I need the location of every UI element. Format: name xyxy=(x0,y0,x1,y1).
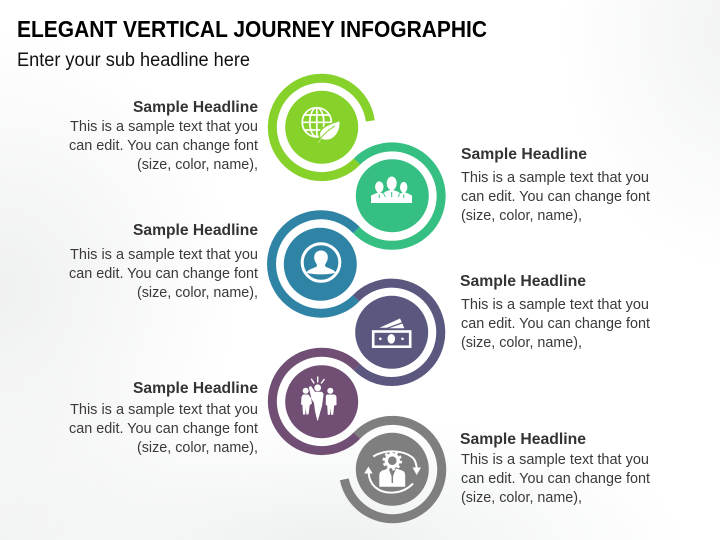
icon: banknotes xyxy=(373,318,410,347)
text block: right 2: Sample Headline xyxy=(460,273,586,290)
text block: left 3: can edit. You can change font xyxy=(69,421,258,437)
text block: left 2 xyxy=(69,222,258,301)
text block: right 2: can edit. You can change font xyxy=(461,316,650,332)
text block: left 1: (size, color, name), xyxy=(137,157,258,173)
text block: left 3: (size, color, name), xyxy=(137,440,258,456)
text block: right 3: can edit. You can change font xyxy=(461,471,650,487)
text block: right 2: This is a sample text that you xyxy=(461,297,649,313)
text block: right 3: (size, color, name), xyxy=(461,490,582,506)
text block: left 1: This is a sample text that you xyxy=(70,119,258,135)
journey step 1: green xyxy=(272,78,370,177)
journey step 5: plum xyxy=(272,352,358,451)
text block: left 1: Sample Headline xyxy=(133,99,258,116)
text block: left 2: This is a sample text that you xyxy=(70,247,258,263)
text block: left 3: Sample Headline xyxy=(133,380,258,397)
text block: right 3: Sample Headline xyxy=(460,431,586,448)
text block: right 1: Sample Headline xyxy=(461,146,587,163)
journey step 2: teal xyxy=(356,147,441,245)
text block: right 1: This is a sample text that you xyxy=(461,170,649,186)
text block: left 3 xyxy=(69,380,258,456)
icon: person in circle xyxy=(302,244,340,281)
text block: left 1: can edit. You can change font xyxy=(69,138,258,154)
icon: team of three xyxy=(371,176,412,203)
journey step 6: gray xyxy=(344,420,442,519)
icon: group with raised hand xyxy=(301,376,336,420)
text block: right 1: (size, color, name), xyxy=(461,208,582,224)
text block: left 2: can edit. You can change font xyxy=(69,266,258,282)
text block: right 3 xyxy=(460,431,650,506)
text block: left 3: This is a sample text that you xyxy=(70,402,258,418)
text block: right 2: (size, color, name), xyxy=(461,335,582,351)
text block: right 3: This is a sample text that you xyxy=(461,452,649,468)
icon: person with gear and cycle arrows xyxy=(364,451,421,493)
text block: left 2: (size, color, name), xyxy=(137,285,258,301)
icon: globe and leaf xyxy=(302,108,340,144)
journey step 4: navy xyxy=(355,283,441,381)
text block: left 1 xyxy=(69,99,258,173)
subtitle: Enter your sub headline here xyxy=(17,50,250,71)
journey step 3: blue xyxy=(272,215,357,313)
title: ELEGANT VERTICAL JOURNEY INFOGRAPHIC xyxy=(17,16,487,42)
text block: left 2: Sample Headline xyxy=(133,222,258,239)
text block: right 1 xyxy=(461,146,650,224)
text block: right 1: can edit. You can change font xyxy=(461,189,650,205)
text block: right 2 xyxy=(460,273,650,351)
